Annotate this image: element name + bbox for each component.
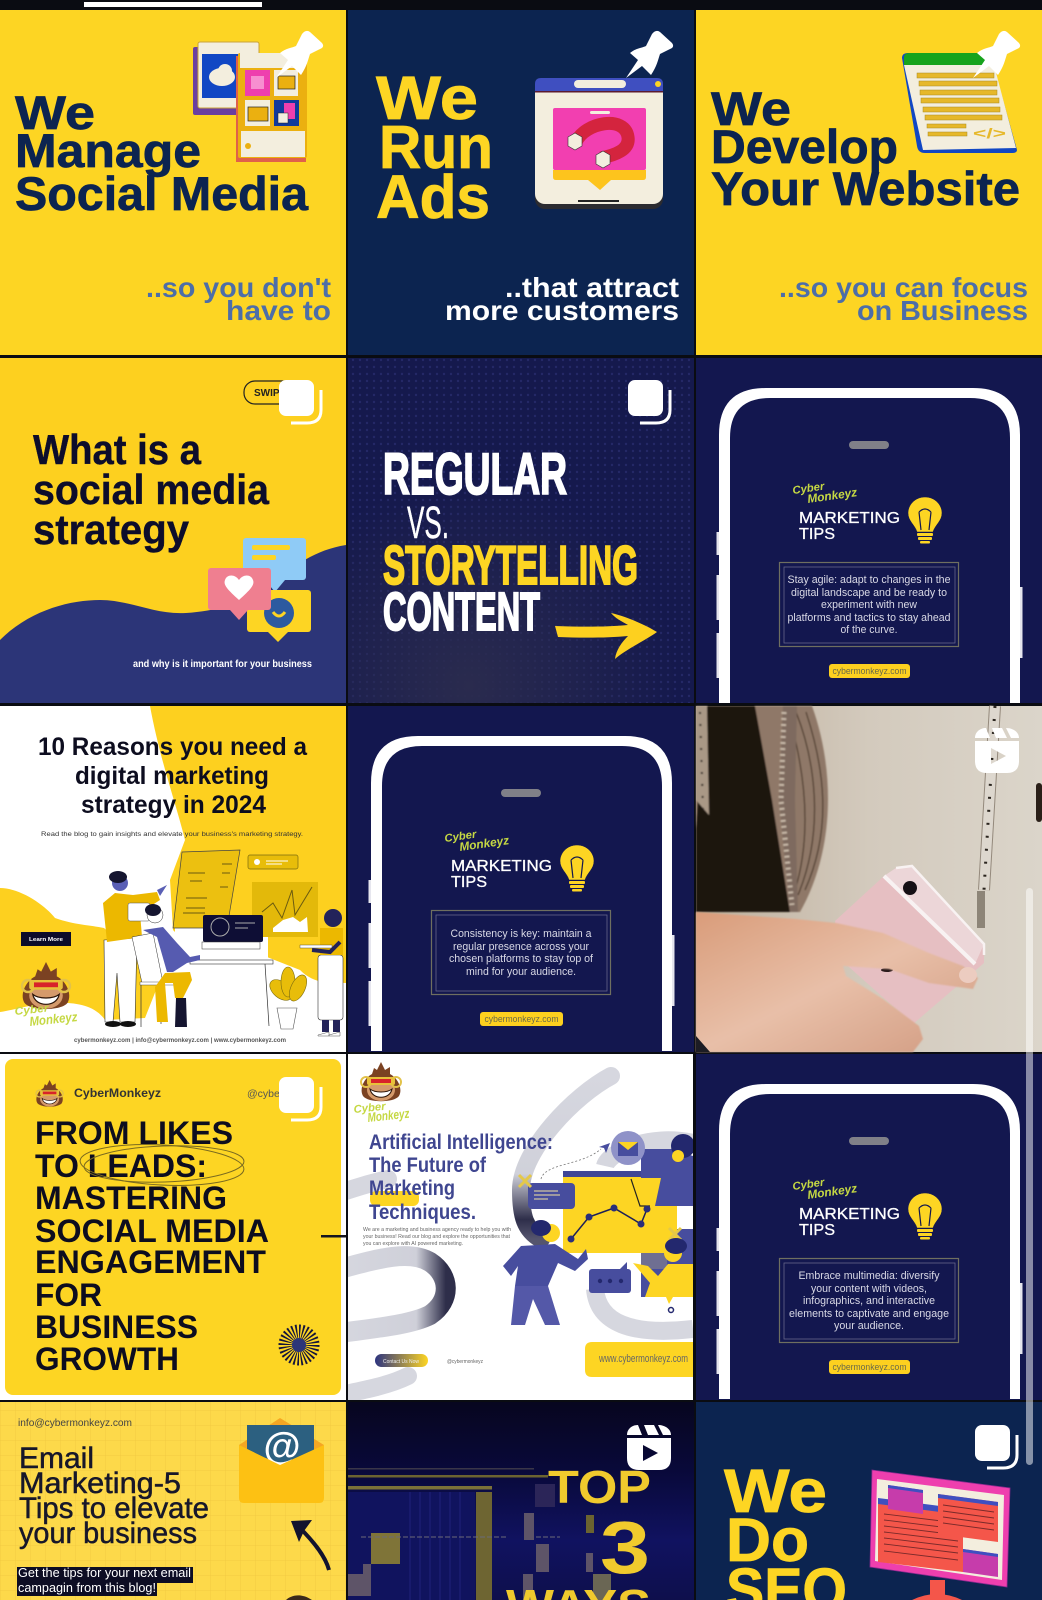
illustration: social media windows [193,42,307,162]
panel: marketing tip stay agile [696,358,1042,703]
photo: hand [696,912,978,1052]
button: learn more: Learn More [29,937,63,943]
heading [724,1457,847,1600]
heading: We [724,1457,827,1525]
phone side buttons [716,1228,1022,1374]
marketing tips heading: MARKETING [451,858,552,875]
highlight [370,1191,419,1206]
tip box: your audience. [834,1320,904,1332]
tip box: your content with videos, [811,1283,927,1295]
swipe pill: SWIPE [254,388,287,399]
call to action label: Get the tips for your next email [18,1566,191,1580]
heading [35,1115,269,1377]
arrow [291,1520,329,1570]
tip box: of the curve. [840,624,898,636]
panel: photo of hand holding phone [696,706,1042,1052]
phone frame [719,388,1020,703]
yellow shape right [150,706,346,983]
panel: regular vs storytelling content [348,358,694,703]
phone side buttons [368,880,674,1026]
sunburst [286,1332,312,1358]
logo: Cyber [792,481,826,497]
icon: carousel [975,1425,1017,1468]
url pill: cybermonkeyz.com [832,1362,907,1373]
heading: We [376,64,478,132]
heading: Email [19,1442,94,1475]
marketing tips heading [799,1206,900,1239]
url pill: cybermonkeyz.com [832,666,907,677]
tagline: ..so you can focus [779,272,1028,303]
illustration: chat bubbles [208,538,311,642]
illustration: code window: </> [973,125,1006,141]
tip box: platforms and tactics to stay ahead [788,612,950,624]
panel: artificial intelligence [340,1054,695,1400]
heading: Ads [376,163,490,231]
panel: 10 reasons blog post [0,706,346,1052]
body copy: you can explore with AI powered marketing. [363,1241,463,1247]
marketing tips heading: TIPS [451,874,487,891]
marketing tips heading: TIPS [799,1222,835,1239]
panel: marketing tip consistency [348,706,694,1052]
logo: Monkeyz [806,1181,858,1202]
logo [792,481,858,506]
heading: ENGAGEMENT [35,1244,266,1280]
icon: light bulb [908,1193,942,1240]
tip box [432,910,610,994]
heading [376,64,493,231]
speaker [849,1137,889,1145]
heading: 3 [600,1506,650,1589]
panel: top 3 ways reel [348,1402,694,1600]
button: learn more [21,932,71,946]
heading: Manage [15,124,201,177]
marketing tips heading: MARKETING [799,510,900,527]
panel: we do seo [696,1402,1042,1600]
icon: monkey mascot [36,1080,63,1107]
gray swooshes [340,1076,693,1395]
heading: FOR [35,1277,102,1313]
swipe pill [244,381,304,404]
tagline: on Business [857,295,1028,326]
tip box: mind for your audience. [466,966,576,978]
tagline [146,272,331,326]
icon: monkey mascot [22,962,70,1009]
wave [0,545,346,703]
logo: Cyber [444,829,478,845]
illustration: office team [103,850,343,1036]
icon: email envelope [239,1418,324,1503]
heading: 10 Reasons you need a [38,733,308,761]
marketing tips heading: TIPS [799,526,835,543]
heading [38,733,308,819]
heading [383,442,638,642]
illustration: code window [902,53,1017,153]
logo: Cyber [792,1177,826,1193]
heading [369,1131,553,1224]
heading: social media [33,466,270,513]
caption: and why is it important for your business [133,659,312,670]
icon: reel [627,1425,671,1470]
phone frame [719,1084,1020,1399]
website tag [585,1342,693,1377]
icon: pin [973,31,1020,78]
heading: STORYTELLING [383,534,638,596]
tagline: ..that attract [505,272,679,303]
logo [353,1101,410,1125]
heading: Marketing [369,1177,455,1200]
call to action label: campagin from this blog! [18,1581,156,1595]
tip box: Stay agile: adapt to changes in the [788,574,950,586]
panel: email marketing tips [0,1402,346,1600]
arrow [555,613,657,659]
yellow card [5,1059,341,1395]
logo: Cyber [14,1002,50,1018]
photo: fingernail [959,967,977,983]
logo [444,829,510,854]
logo [14,1002,78,1029]
panel: we develop your website [696,10,1042,355]
footer contact: cybermonkeyz.com | info@cybermonkeyz.com | www.cybermonkeyz.com [74,1038,286,1044]
heading: We [711,82,791,135]
abstract glitch blocks [348,1468,611,1600]
heading: Do [726,1506,809,1574]
heading: MASTERING [35,1180,227,1216]
tagline: ..so you don't [146,272,331,303]
logo: Monkeyz [806,485,858,506]
scrollbar [1026,888,1033,1465]
logo: Monkeyz [367,1106,410,1125]
marketing tips heading [451,858,552,891]
heading: Your Website [711,162,1020,215]
photo: hoodie cord [977,706,1042,928]
email address: info@cybermonkeyz.com [18,1417,132,1429]
button: contact us: Contact Us Now [383,1359,419,1365]
cropped decoration [286,1595,312,1600]
tagline: have to [226,295,331,326]
website tag: www.cybermonkeyz.com [598,1353,688,1365]
hand drawn oval [79,1141,245,1189]
illustration: monitor [870,1470,1010,1600]
heading: SOCIAL MEDIA [35,1213,269,1249]
heading [506,1461,651,1600]
marketing tips heading: MARKETING [799,1206,900,1223]
heading [711,82,1020,215]
heading: TOP [548,1461,651,1513]
logo: Monkeyz [29,1009,78,1029]
marketing tips heading [799,510,900,543]
tip box: infographics, and interactive [803,1295,935,1307]
icon: pin [276,31,323,78]
icon: carousel [279,1077,321,1120]
photo: sleeve corner [696,1036,710,1052]
body copy [363,1227,511,1247]
tip box: chosen platforms to stay top of [449,953,594,965]
photo: rose gold phone [835,866,984,1024]
tip box: experiment with new [821,599,917,611]
heading: Run [379,113,493,181]
heading: VS. [407,497,449,548]
yellow shape left [0,888,160,1020]
icon: light bulb [908,497,942,544]
panel: we manage social media [0,10,346,355]
panel: marketing tip multimedia [696,1054,1042,1400]
logo: Cyber [353,1101,387,1116]
tip box [780,1258,958,1342]
heading: The Future of [369,1154,487,1177]
tagline [445,272,679,326]
heading: strategy in 2024 [81,791,266,819]
story progress bar [84,2,262,7]
handle: @cybermonkeyz [447,1359,483,1365]
button: contact us [375,1354,428,1367]
subtitle: Read the blog to gain insights and elevate your business's marketing strategy. [41,831,303,838]
heading: Develop [711,120,898,173]
tip box: Consistency is key: maintain a [450,928,592,940]
body copy: your business! Read our blog and explore the opportunities that [363,1234,510,1240]
brand name: CyberMonkeyz [74,1086,161,1100]
heading: Marketing-5 [19,1467,181,1500]
logo [792,1177,858,1202]
panel: we run ads [348,10,694,355]
body copy: We are a marketing and business agency ready to help you with [363,1227,511,1233]
icon: monkey mascot [361,1062,401,1101]
tip box: regular presence across your [453,941,589,953]
heading: CONTENT [383,582,540,642]
tip box: elements to captivate and engage [789,1308,949,1320]
tagline: more customers [445,295,679,326]
photo: hair [696,706,828,912]
panel: what is a social media strategy [0,358,346,703]
heading: FROM LIKES [35,1115,233,1151]
icon: carousel [628,380,670,423]
heading: Tips to elevate [19,1492,209,1525]
tip box: digital landscape and be ready to [791,587,947,599]
speaker [849,441,889,449]
icon: pin [626,31,673,78]
icon: reel [975,728,1019,773]
heading [15,86,309,220]
icon: email envelope: @ [263,1426,301,1468]
handle: @cyberm [247,1088,292,1100]
url pill: cybermonkeyz.com [484,1014,559,1025]
heading: REGULAR [383,442,567,507]
heading [19,1442,209,1550]
icon: carousel [279,380,321,423]
swipe dash [321,1235,346,1238]
heading: BUSINESS [35,1309,198,1345]
call to action label [17,1566,193,1596]
phone side buttons [716,532,1022,678]
panel: from likes to leads [0,1054,346,1400]
heading: TO LEADS: [35,1148,207,1184]
logo: Monkeyz [458,833,510,854]
heading: Artificial Intelligence: [369,1131,553,1154]
heading: Techniques. [369,1201,476,1224]
heading: digital marketing [75,762,269,790]
illustration: ad device with magnet [535,78,663,209]
heading: GROWTH [35,1341,179,1377]
heading [33,426,270,553]
icon: light bulb [560,845,594,892]
heading: your business [19,1517,197,1550]
heading: What is a [33,426,202,473]
tagline [779,272,1028,326]
tip box [780,562,958,646]
phone frame [371,736,672,1051]
speaker [501,789,541,797]
heading: We [15,86,95,139]
heading: Social Media [15,167,309,220]
heading: strategy [33,506,190,553]
tip box: Embrace multimedia: diversify [798,1270,940,1282]
illustration: marketing team and chart [503,1131,695,1325]
